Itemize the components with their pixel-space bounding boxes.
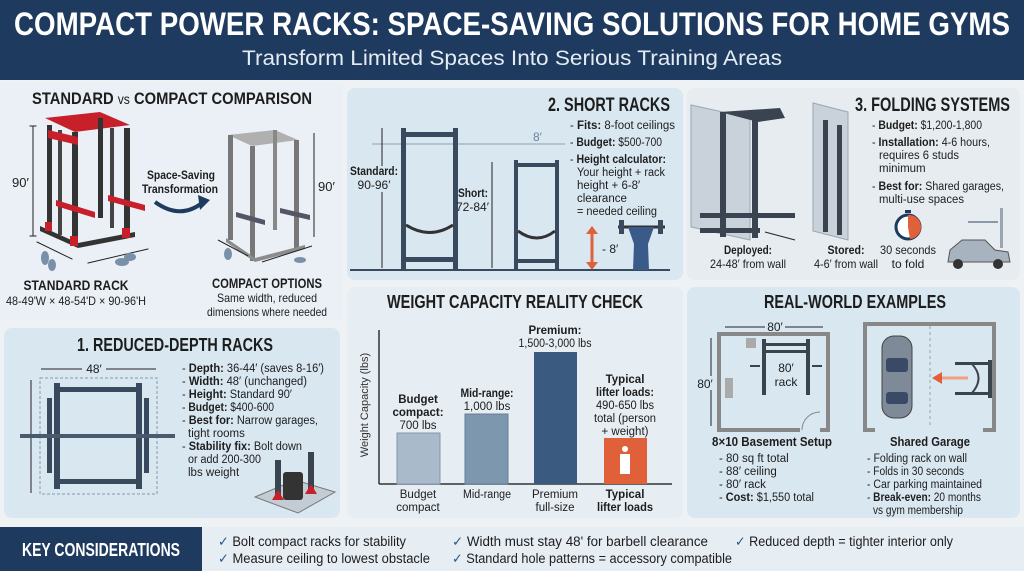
text: reduced-depth bullets: or add 200-300 [188,454,261,466]
icon: footprints [41,248,306,271]
icon: basement floor plan [697,320,828,430]
text: shared garage: - Break-even: 20 months [867,492,981,504]
text: folding bullets: minimum [879,163,926,175]
chart: rack height comparison: 72-84′ [456,200,490,214]
text: short rack bullets: - Fits: 8-foot ceilings [570,120,675,132]
panel: standard vs compact [0,82,343,320]
icon: deployed rack [691,105,795,271]
text: reduced-depth bullets: lbs weight [188,467,240,479]
text: checklist: ✓ Bolt compact racks for stability [218,534,406,549]
icon: basement floor plan: 80′ [697,377,714,391]
icon: lifter with orange arrow: - 8′ [602,242,619,256]
chart: bars [359,325,672,514]
chart: rack height comparison: Standard: [350,164,398,178]
chart: bars: + weight) [602,426,649,438]
chart: bars: Premium: [528,325,582,337]
chart: bars: 490-650 lbs [596,400,654,412]
icon: deployed rack: Deployed: [724,243,772,257]
label: 90 standard: 90′ [12,175,29,190]
panel: reduced-depth racks [4,328,340,518]
icon: basement floor plan: 80′ [778,361,795,375]
icon: top-view rack: 48′ [86,362,103,376]
subtitle: Transform Limited Spaces Into Serious Training Areas [242,47,782,70]
footer: key considerations [0,527,1024,571]
panel: standard vs compact: 48-49'W × 48-54'D × 90-96'H [6,294,146,308]
chart: bars: 1,000 lbs [464,401,511,413]
arrow: transformation [155,195,210,211]
text: standard rack: STANDARD RACK [24,277,128,293]
panel: short racks [347,88,683,280]
text: basement setup: 8×10 Basement Setup [712,434,832,449]
panel: weight capacity chart [347,287,683,518]
heading: weight capacity: WEIGHT CAPACITY REALITY CHECK [387,292,643,312]
text: reduced-depth bullets: - Stability fix: Bolt down [182,441,302,453]
text: basement setup [712,434,832,504]
heading: real-world: REAL-WORLD EXAMPLES [764,292,946,312]
heading: reduced-depth: 1. REDUCED-DEPTH RACKS [77,335,273,355]
chart: bars: compact: [392,407,444,419]
text: shared garage: - Folding rack on wall [867,453,967,465]
chart: bars: Weight Capacity (lbs) [359,353,371,457]
icon: timer: to fold [892,257,924,271]
chart: bars: 1,500-3,000 lbs [518,338,592,350]
text: reduced-depth bullets: - Best for: Narrow garages, [182,415,318,427]
text: basement setup: - Cost: $1,550 total [719,492,814,504]
icon: stored rack [813,103,878,271]
label: 90 compact: 90′ [318,179,335,194]
icon: timer [880,210,936,271]
text: compact options: COMPACT OPTIONS [212,275,322,291]
chart: rack height comparison [350,128,670,270]
chart: bars: Mid-range [463,489,511,501]
text: folding bullets: multi-use spaces [879,194,964,206]
text: checklist: ✓ Width must stay 48' for barbell clearance [452,534,708,549]
text: reduced-depth bullets: - Width: 48′ (unchanged) [182,376,307,388]
text: folding bullets [872,120,1004,206]
icon: deployed rack: 24-48′ from wall [710,257,786,271]
text: shared garage: - Car parking maintained [867,479,982,491]
panel: folding systems [687,88,1020,280]
text: reduced-depth bullets: - Depth: 36-44′ (saves 8-16′) [182,363,324,375]
text: reduced-depth bullets: - Budget: $400-600 [182,402,274,414]
text: short rack bullets: - Height calculator: [570,154,666,166]
chart: rack height comparison: Short: [458,186,488,200]
icon: compact rack [218,130,314,262]
text: short rack bullets: Your height + rack [577,167,665,179]
chart: bars: lifter loads: [596,387,654,399]
icon: basement floor plan: 80′ [767,320,784,334]
text: reduced-depth bullets: tight rooms [188,428,245,440]
text: shared garage: vs gym membership [873,505,963,517]
text: folding bullets: - Best for: Shared garages, [872,181,1004,193]
panel: standard vs compact: Same width, reduced [217,291,317,305]
text: checklist [218,534,953,566]
icon: timer: 30 seconds [880,243,936,257]
chart: bars: Budget [398,394,438,406]
heading: comparison: STANDARD vs COMPACT COMPARISON [32,89,312,108]
icon: standard rack [30,112,148,263]
heading: key considerations: KEY CONSIDERATIONS [22,540,180,560]
icon: lifter with orange arrow [586,220,665,270]
text: reduced-depth bullets [182,363,324,479]
text: basement setup: - 88′ ceiling [719,466,777,478]
text: basement setup: - 80′ rack [719,479,766,491]
chart: bars: total (person [594,413,656,425]
text: short rack bullets: clearance [577,193,627,205]
text: checklist: ✓ Standard hole patterns = accessory compatible [452,551,732,566]
chart: bars: Mid-range: [460,388,514,400]
text: shared garage: Shared Garage [890,434,970,449]
panel: real-world examples [687,287,1020,518]
text: basement setup: - 80 sq ft total [719,453,789,465]
text: checklist: ✓ Measure ceiling to lowest obstacle [218,551,430,566]
panel: standard vs compact: Transformation [142,182,218,196]
chart: bars: 700 lbs [399,420,437,432]
heading: short racks: 2. SHORT RACKS [548,95,670,116]
chart: bars: lifter loads [597,502,653,514]
header [0,0,1024,80]
chart: bars: Typical [606,374,644,386]
icon: stored rack: Stored: [828,243,864,257]
text: short rack bullets: - Budget: $500-700 [570,137,662,149]
icon: top-view rack [20,362,175,494]
icon: car and wall bracket [948,208,1010,269]
chart: bars: Premium [532,489,578,501]
text: folding bullets: requires 6 studs [879,150,959,162]
icon: bolted base with plates [255,452,335,513]
text: space-saving transformation: Space-Saving [147,168,215,182]
chart: rack height comparison: 8′ [533,130,543,144]
text: short rack bullets: height + 6-8′ [577,180,640,192]
panel: standard vs compact: dimensions where needed [207,305,327,319]
text: checklist: ✓ Reduced depth = tighter interior only [735,534,953,549]
text: short rack bullets: = needed ceiling [577,206,657,218]
text: shared garage [867,434,982,517]
icon: garage plan [865,324,994,430]
text: folding bullets: - Budget: $1,200-1,800 [872,120,982,132]
chart: bars: Budget [400,489,437,501]
text: folding bullets: - Installation: 4-6 hours, [872,137,990,149]
text: shared garage: - Folds in 30 seconds [867,466,964,478]
text: reduced-depth bullets: - Height: Standard 90′ [182,389,292,401]
icon: basement floor plan: rack [775,375,798,389]
text: short rack bullets [570,120,675,218]
chart: bars: compact [396,502,441,514]
chart: bars: full-size [536,502,574,514]
chart: bars: Typical [606,489,644,501]
icon: stored rack: 4-6′ from wall [814,257,878,271]
chart: rack height comparison: 90-96′ [358,178,391,192]
